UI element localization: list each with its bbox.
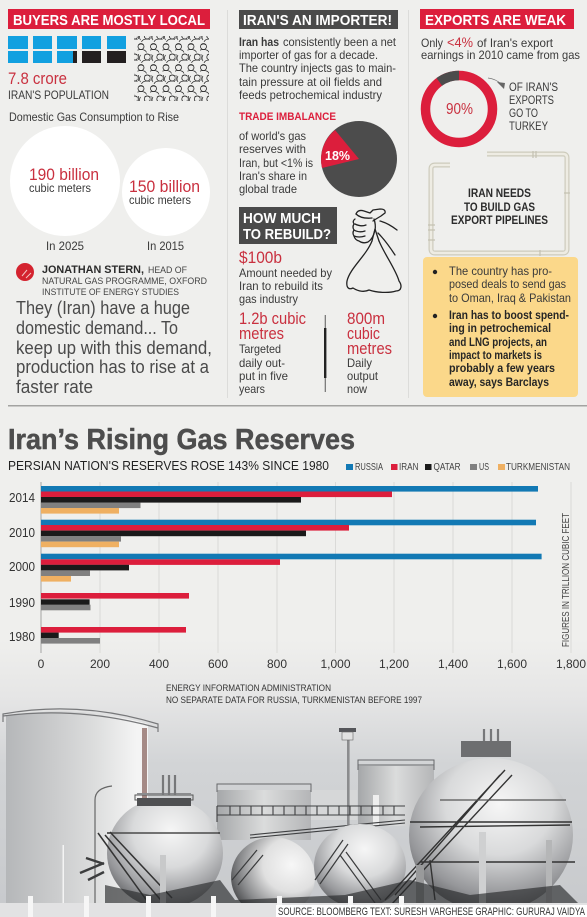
importer paragraph: consistently been a net (283, 35, 397, 49)
stat: current daily output: cubic (347, 324, 380, 343)
stat: targeted daily output: metres (239, 324, 284, 343)
year axis labels: 1990 (9, 595, 35, 610)
export earnings text: of Iran's export (477, 36, 554, 50)
icon: pipeline frame (428, 151, 570, 256)
turkey label (509, 80, 558, 133)
callout: deals and spending: The country has pro- (449, 264, 552, 278)
pipelines text (451, 188, 548, 227)
rebuild amount: $100b (239, 248, 282, 267)
speaker attribution: HEAD OF (148, 265, 187, 276)
light pole (339, 728, 356, 825)
importer paragraph (239, 35, 397, 102)
pipelines text: TO BUILD GAS (464, 202, 535, 214)
palm leaves (80, 858, 104, 880)
chart subheading: Domestic Gas Consumption to Rise (9, 110, 179, 124)
callout: deals and spending: ing in petrochemical (449, 321, 551, 335)
importer paragraph: tain pressure at oil fields and (239, 75, 382, 89)
chart notes: NO SEPARATE DATA FOR RUSSIA, TURKMENISTAN BEFORE 1997 (166, 695, 422, 706)
stairs between spheres (232, 840, 381, 903)
walkway (217, 806, 405, 838)
callout: deals and spending: probably a few years (449, 361, 555, 375)
bars: 1980 (41, 627, 186, 644)
icon: population squares (8, 36, 126, 63)
value axis labels: 800 (267, 657, 287, 671)
bubble: 2025 consumption: 190 billion (29, 165, 99, 184)
stat: targeted daily output: years (239, 382, 265, 396)
heading: buyers are mostly local: BUYERS ARE MOSTLY LOCAL (13, 12, 205, 29)
bars: 2014 (41, 486, 538, 514)
icon: hand holding money bag (347, 209, 401, 292)
population figure: 7.8 crore (8, 69, 67, 88)
population figure (8, 69, 109, 102)
heading: how much to rebuild: HOW MUCH (243, 210, 321, 227)
large cylindrical tank (3, 709, 158, 903)
sphere middle left (231, 837, 315, 917)
street lamp (95, 786, 112, 903)
stat: targeted daily output: Targeted (239, 342, 281, 356)
stat: targeted daily output (239, 309, 306, 396)
rebuild amount: Amount needed by (239, 266, 332, 280)
dark base (105, 880, 578, 903)
callout: deals and spending: posed deals to send gas (449, 277, 566, 291)
value axis labels: 400 (149, 657, 169, 671)
value axis labels: 1,400 (438, 657, 468, 671)
value axis labels (38, 657, 586, 671)
rebuild amount: Iran to rebuild its (239, 279, 323, 293)
turkey label: EXPORTS (509, 93, 554, 107)
stat: current daily output: 800m (347, 309, 385, 328)
year axis labels: 1980 (9, 629, 35, 644)
rebuild amount: gas industry (239, 292, 298, 306)
export earnings text: Only (421, 36, 443, 50)
callout: deals and spending (423, 257, 578, 397)
donut chart: 90% to Turkey: 90% (446, 101, 473, 118)
bars: 2000 (41, 554, 542, 582)
value axis labels: 1,000 (320, 657, 351, 671)
sphere middle right (314, 824, 406, 908)
trade imbalance subheading: TRADE IMBALANCE (239, 111, 336, 123)
icon: speaker portrait (16, 263, 34, 281)
title: Iran’s Rising Gas Reserves (8, 424, 355, 456)
wall posts (28, 896, 404, 917)
legend: TURKMENISTAN (506, 462, 570, 473)
donut chart: 90% to Turkey (426, 75, 492, 142)
right background tank (358, 760, 434, 826)
heading: iran's an importer: IRAN'S AN IMPORTER! (243, 12, 392, 29)
callout: deals and spending: Iran has to boost spend- (449, 308, 569, 322)
stat: targeted daily output: daily out- (239, 356, 285, 370)
stat: targeted daily output: 1.2b cubic (239, 309, 306, 328)
turkey label: GO TO (509, 106, 538, 120)
bars: 1990 (41, 593, 189, 610)
quote: faster rate (16, 377, 93, 397)
value axis labels: 0 (38, 657, 45, 671)
value axis labels: 1,200 (379, 657, 409, 671)
panel: exports are weak (420, 9, 580, 397)
heading: exports are weak: EXPORTS ARE WEAK (425, 12, 566, 29)
stat: targeted daily output: put in five (239, 369, 288, 383)
stat: current daily output: metres (347, 339, 392, 358)
stat: current daily output: output (347, 369, 379, 383)
quote: keep up with this demand, (16, 338, 212, 358)
pipelines text: IRAN NEEDS (468, 188, 531, 200)
stat: current daily output: Daily (347, 356, 372, 370)
icon: crowd of people (134, 36, 209, 101)
heading: how much to rebuild (239, 207, 337, 244)
importer paragraph: feeds petrochemical industry (239, 88, 382, 102)
year axis labels: 2014 (9, 490, 35, 505)
trade imbalance text: reserves with (239, 142, 306, 156)
quote (16, 298, 212, 397)
year axis labels (9, 490, 35, 644)
chart notes (166, 683, 422, 706)
heading: how much to rebuild: TO REBUILD? (243, 226, 331, 243)
callout: deals and spending: and LNG projects, an (449, 335, 547, 349)
sphere right (385, 729, 575, 912)
legend: QATAR (434, 462, 460, 473)
pie chart: 18%: 18% (325, 148, 350, 163)
quote: production has to rise at a (16, 357, 210, 377)
callout: deals and spending: to Oman, Iraq & Pakistan (449, 291, 571, 305)
trade imbalance text: Iran's share in (239, 169, 307, 183)
importer paragraph: importer of gas for a decade. (239, 48, 378, 62)
axis unit label: FIGURES IN TRILLION CUBIC FEET (561, 513, 572, 647)
photo: gas storage tanks (0, 709, 587, 917)
rebuild amount (239, 248, 332, 306)
bubble: 2015 consumption: cubic meters (129, 193, 191, 207)
bubble: 2025 consumption: In 2025 (46, 239, 84, 253)
legend: RUSSIA (355, 462, 383, 473)
speaker attribution (42, 264, 207, 298)
population figure: IRAN'S POPULATION (8, 90, 109, 102)
quote: domestic demand... To (16, 318, 178, 338)
quote: They (Iran) have a huge (16, 298, 190, 318)
turkey label: TURKEY (509, 119, 548, 133)
bubble: 2015 consumption (122, 148, 210, 253)
speaker attribution: NATURAL GAS PROGRAMME, OXFORD (42, 276, 207, 287)
year axis labels: 2010 (9, 525, 35, 540)
panel: buyers are mostly local (8, 9, 212, 397)
export earnings text (421, 34, 580, 62)
speaker attribution: JONATHAN STERN, (42, 264, 144, 276)
year axis labels: 2000 (9, 559, 35, 574)
subtitle: PERSIAN NATION'S RESERVES ROSE 143% SINCE 1980 (8, 458, 329, 473)
value axis labels: 600 (208, 657, 228, 671)
front wall (0, 903, 587, 917)
importer paragraph: Iran has (239, 35, 279, 49)
pie chart: 18% (321, 121, 397, 197)
bar chart: gas reserves (9, 482, 586, 671)
trade imbalance text: of world's gas (239, 129, 306, 143)
callout: deals and spending: impact to markets is (449, 348, 542, 362)
arrow: donut to label (488, 78, 505, 89)
importer paragraph: The country injects gas to main- (239, 61, 396, 75)
export earnings text: <4% (447, 34, 473, 50)
bubble: 2025 consumption: cubic meters (29, 181, 91, 195)
speaker attribution: INSTITUTE OF ENERGY STUDIES (42, 287, 179, 298)
stat: current daily output (347, 309, 392, 396)
bubble: 2015 consumption: In 2015 (147, 239, 184, 253)
pipelines text: EXPORT PIPELINES (451, 215, 548, 227)
trade imbalance text: global trade (239, 182, 297, 196)
turkey label: OF IRAN'S (509, 80, 558, 94)
value axis labels: 1,800 (556, 657, 586, 671)
bubble: 2025 consumption (10, 126, 120, 253)
legend: IRAN (399, 462, 418, 473)
bars: 2010 (41, 520, 536, 547)
panel: iran's an importer (239, 10, 401, 396)
legend (346, 462, 570, 473)
callout: deals and spending: away, says Barclays (449, 375, 549, 389)
middle background tank (217, 784, 357, 840)
value axis labels: 200 (90, 657, 110, 671)
stat: current daily output: now (347, 382, 367, 396)
trade imbalance text (239, 129, 313, 196)
legend: US (479, 462, 489, 473)
bubble: 2015 consumption: 150 billion (129, 177, 200, 196)
value axis labels: 1,600 (497, 657, 527, 671)
chart notes: ENERGY INFORMATION ADMINISTRATION (166, 683, 331, 694)
trade imbalance text: Iran, but <1% is (239, 156, 313, 170)
sphere left (98, 775, 223, 908)
